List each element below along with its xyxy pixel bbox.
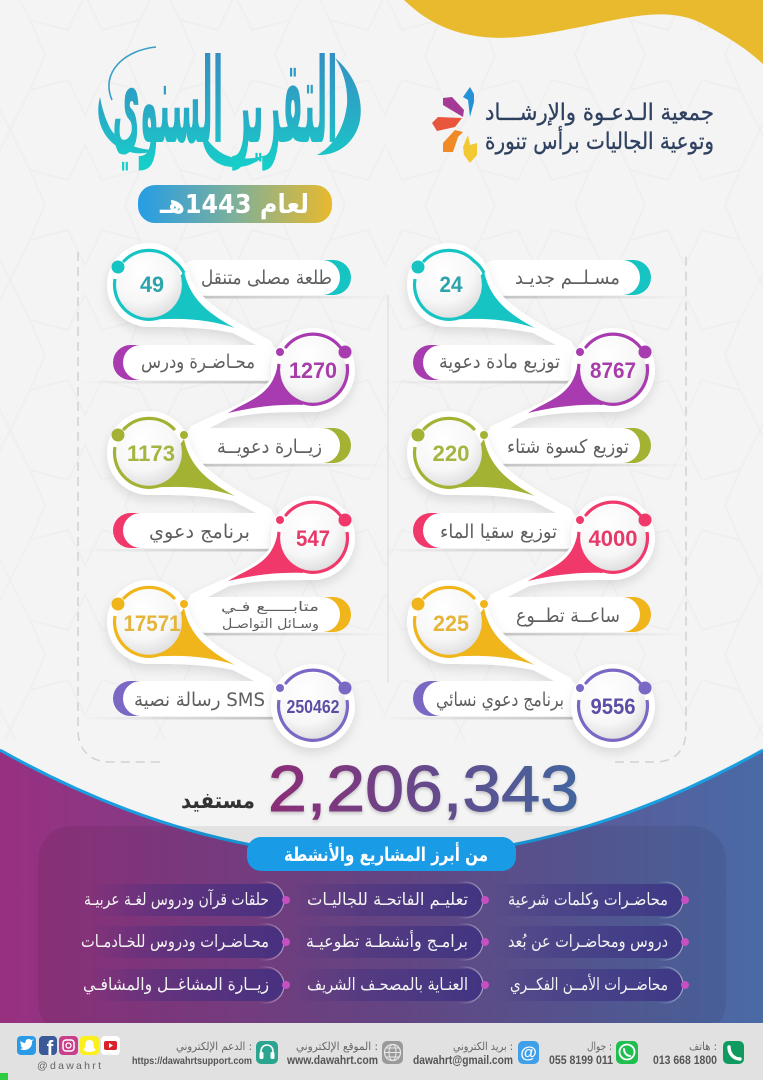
stat: 1270 — [78, 328, 355, 442]
bottom gradient band — [0, 750, 763, 1023]
stat: 4000: 4000 — [588, 526, 638, 551]
social icons: f — [47, 1038, 54, 1060]
item row 3: العنـاية بالمصحـف الشريف — [307, 975, 468, 995]
social icons: @dawahrt — [37, 1060, 101, 1072]
contact: support: الدعم الإلكتروني : — [176, 1040, 252, 1053]
item row 1: محاضـرات وكلمات شرعية — [508, 890, 668, 910]
stat: 49 — [107, 243, 389, 357]
yellow corner shape — [404, 0, 763, 64]
year pill — [138, 185, 332, 223]
title calligraphy — [98, 35, 361, 171]
stat: 547: 547 — [296, 526, 330, 551]
stat: 547 — [78, 496, 355, 610]
beneficiaries total: مستفيد — [181, 789, 255, 814]
item row 2: محـاضـرات ودروس للخـادمـات — [81, 932, 269, 952]
contact: mobile — [549, 1040, 638, 1067]
contact: email: dawahrt@gmail.com — [413, 1055, 513, 1067]
stat: 250462: رسالة نصية SMS — [134, 689, 265, 711]
stat: 4000 — [378, 496, 655, 610]
contact: email: بريد الكتروني : — [453, 1040, 513, 1053]
contact: website: الموقع الإلكتروني : — [296, 1040, 378, 1053]
item row 2 — [81, 924, 689, 960]
stat: 8767: 8767 — [590, 358, 636, 383]
contact: website — [286, 1040, 403, 1067]
item row 3 — [83, 967, 689, 1003]
item row 2: دروس ومحاضـرات عن بُعد — [508, 932, 668, 952]
stat: 1173: 1173 — [127, 441, 175, 466]
stat: 220 — [407, 411, 689, 525]
contact: support — [132, 1040, 278, 1067]
stat: 9556 — [378, 664, 655, 748]
stat: 8767 — [378, 328, 655, 442]
contact: website: www.dawahrt.com — [286, 1055, 378, 1067]
stat: 24: مسـلــم جديـد — [515, 267, 620, 289]
activities list — [81, 882, 689, 1003]
stat: 220: توزيع كسوة شتاء — [507, 436, 629, 458]
stat: 9556: برنامج دعوي نسائي — [436, 689, 564, 711]
dashed frame — [78, 252, 686, 762]
stat: 8767: توزيع مادة دعوية — [439, 351, 560, 373]
year pill: لعام 1443هـ — [159, 190, 309, 220]
text: التقرير السنوي — [112, 35, 338, 171]
stat: 1270: 1270 — [289, 358, 337, 383]
contact: phone — [653, 1040, 744, 1067]
stat: 1270: محـاضـرة ودرس — [141, 351, 255, 373]
item row 3: زيــارة المشاغــل والمشافـي — [83, 975, 269, 995]
activities heading — [247, 837, 516, 871]
stat: 250462: 250462 — [286, 697, 340, 717]
stats column: left — [78, 243, 389, 748]
stat: 225: 225 — [433, 611, 469, 636]
contact: email — [413, 1040, 539, 1067]
stat: 49: 49 — [140, 272, 164, 297]
activities heading: من أبرز المشاريع والأنشطة — [284, 842, 488, 866]
stat: 1173 — [107, 411, 389, 525]
stat: 225: ساعــة تطــوع — [516, 605, 620, 627]
footer contacts — [17, 1036, 744, 1072]
stat: 1173: زيــارة دعويــة — [217, 436, 322, 458]
contact: phone: 013 668 1800 — [653, 1055, 717, 1067]
stats column: right — [378, 243, 689, 748]
contact: email: @ — [520, 1043, 537, 1062]
stat: 17571: متابـــــع فـي — [221, 600, 319, 615]
stat: 250462 — [78, 664, 355, 748]
stat: 225 — [407, 580, 689, 694]
stat: 4000: توزيع سقيا الماء — [440, 521, 557, 543]
stat: 24: 24 — [440, 272, 463, 297]
stat: 220: 220 — [432, 441, 470, 466]
stat: 17571 — [107, 580, 389, 694]
contact: mobile: 055 8199 011 — [549, 1055, 614, 1067]
corner marker — [0, 1073, 8, 1080]
organisation logo: وتوعية الجاليات برأس تنورة — [485, 126, 714, 155]
organisation logo — [432, 87, 714, 163]
item row 3: محاضــرات الأمــن الفكــري — [510, 974, 668, 995]
contact: phone: هاتف : — [689, 1040, 717, 1053]
stat: 49: طلعة مصلى متنقل — [201, 267, 332, 289]
stat: 17571: 17571 — [124, 611, 180, 636]
item row 1: تعليـم الفاتحـة للجاليـات — [307, 890, 468, 910]
activities panel — [38, 826, 726, 1036]
stat: 17571: وسـائل التواصـل — [222, 617, 319, 632]
beneficiaries total: 2,206,343 — [268, 752, 579, 825]
item row 2: برامـج وأنشطـة تطوعيـة — [306, 930, 468, 952]
stat: 9556: 9556 — [590, 694, 636, 719]
page background — [0, 0, 763, 740]
stat: 547: برنامج دعوي — [149, 521, 250, 543]
item row 1 — [84, 882, 689, 918]
logo mark — [432, 87, 477, 163]
social icons — [17, 1036, 120, 1072]
item row 1: حلقات قرآن ودروس لغـة عربيـة — [84, 888, 269, 910]
stat: 24 — [407, 243, 689, 357]
contact: support: https://dawahrtsupport.com — [132, 1055, 252, 1067]
contact: mobile: جوال : — [587, 1040, 612, 1053]
organisation name: جمعية الـدعـوة والإرشـــاد — [485, 100, 714, 126]
